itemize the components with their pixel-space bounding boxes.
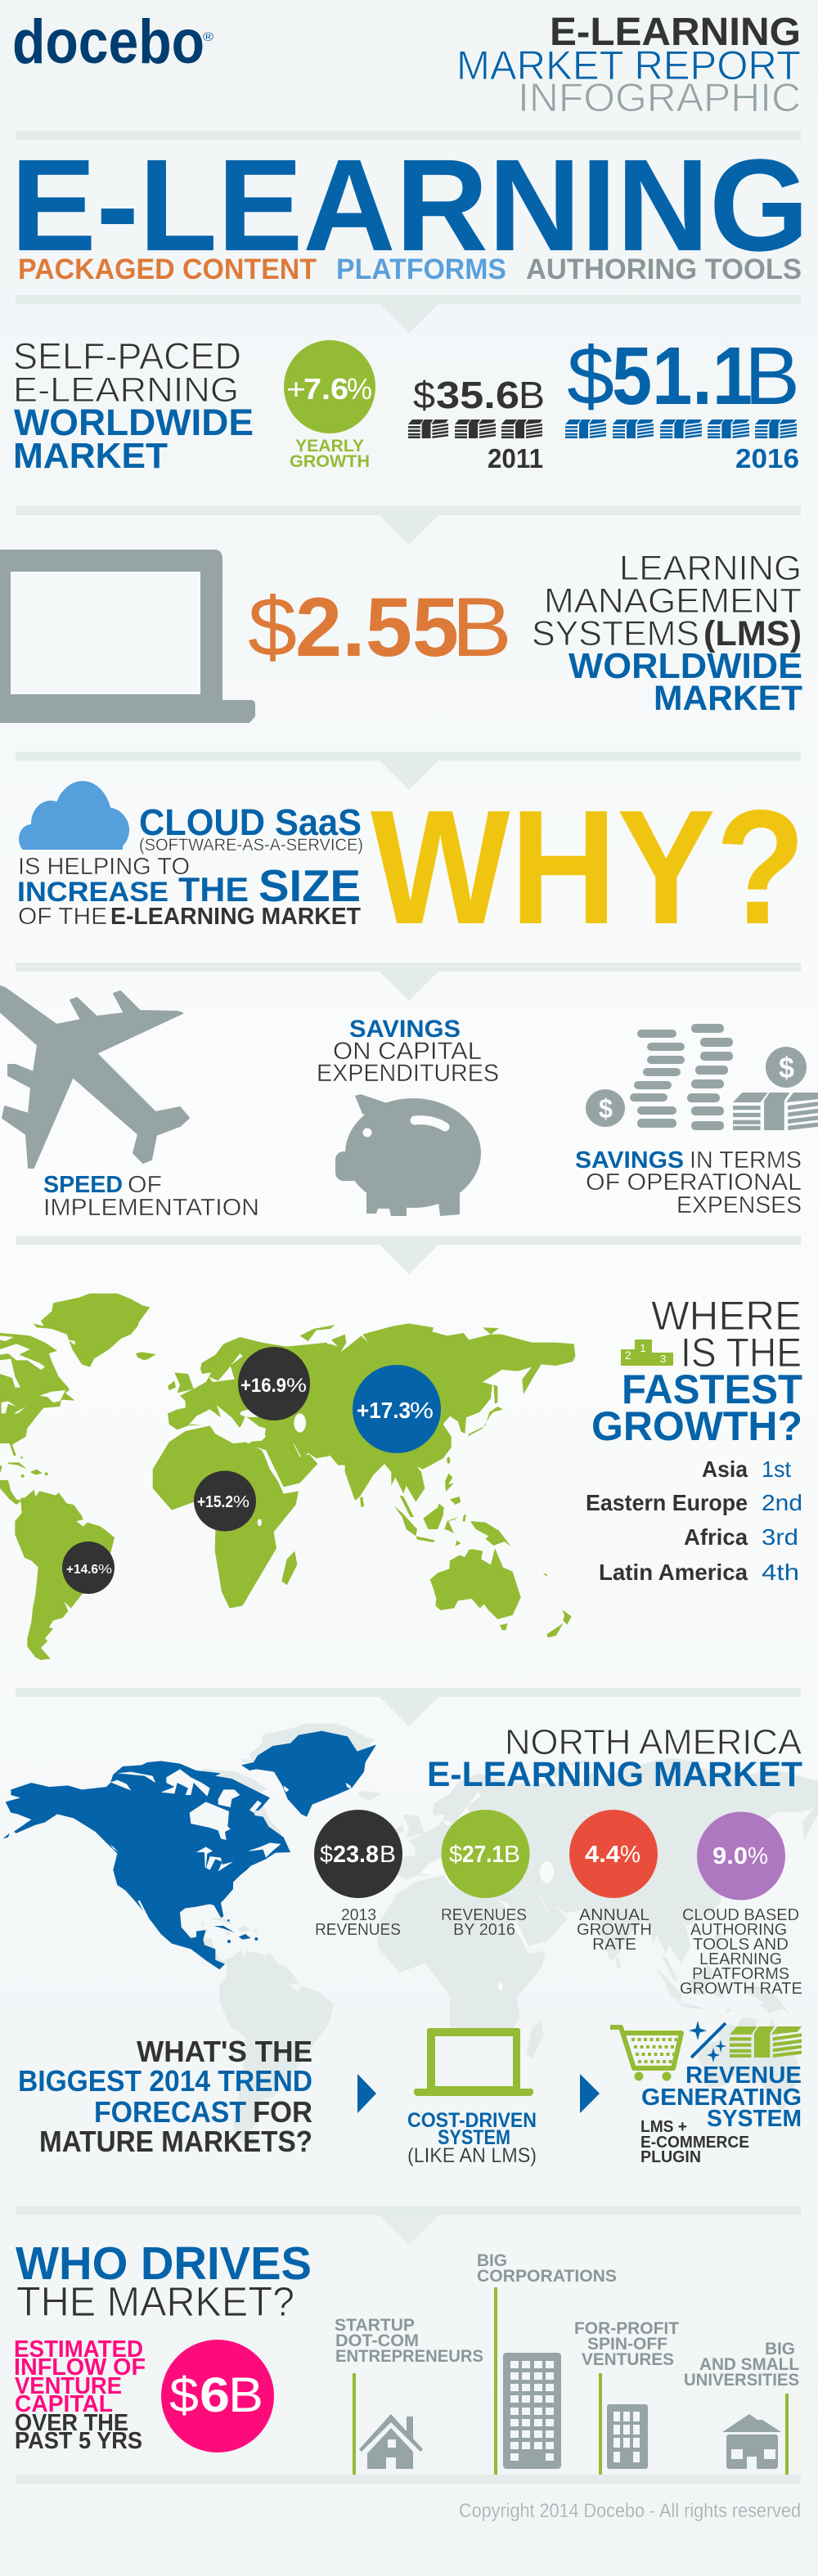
- header: report title: [456, 11, 801, 120]
- stat: revenues by 2016: REVENUES: [441, 1906, 527, 1924]
- self-paced heading: WORLDWIDE: [14, 402, 254, 443]
- icon: podium: 2: [625, 1349, 631, 1362]
- growth bubble: Latin America: %: [98, 1563, 112, 1577]
- cost-driven system text: [407, 2109, 537, 2167]
- venture capital bubble: B: [228, 2367, 263, 2422]
- icon: airplane: [0, 986, 189, 1168]
- who drives heading: WHO DRIVES: [16, 2237, 312, 2290]
- LMS value: $: [248, 581, 297, 674]
- stat: 2013 revenues: REVENUES: [315, 1921, 401, 1939]
- ranking list: 2nd: [762, 1490, 802, 1515]
- icon: podium: [621, 1340, 673, 1366]
- 2014 trend question: [18, 2035, 312, 2158]
- North America heading: NORTH AMERICA: [505, 1722, 802, 1762]
- cloud SaaS text: E-LEARNING MARKET: [110, 904, 361, 930]
- growth circle: %: [347, 372, 372, 406]
- market driver: corporations: [477, 2251, 617, 2475]
- 2016 value: $: [567, 330, 614, 422]
- fastest growth heading: IS THE: [681, 1330, 802, 1376]
- stat: cloud based growth rate: 9.0: [712, 1843, 748, 1869]
- header: report title: E-LEARNING: [550, 11, 801, 54]
- growth bubble: Eastern Europe: %: [286, 1375, 307, 1397]
- cloud SaaS text: IS HELPING TO: [18, 854, 190, 880]
- market driver: spin-off ventures: FOR-PROFIT: [574, 2319, 679, 2338]
- North America map: [2, 1731, 376, 1969]
- growth bubble: Latin America: +14.6: [66, 1563, 98, 1577]
- who drives heading: [16, 2237, 312, 2325]
- LMS heading: SYSTEMS: [532, 614, 699, 653]
- cloud SaaS text: INCREASE: [17, 877, 169, 908]
- cost-driven system text: (LIKE AN LMS): [407, 2144, 537, 2167]
- fastest growth heading: GROWTH?: [591, 1403, 802, 1449]
- header: docebo logo: docebo: [12, 7, 204, 77]
- 2011 value: B: [519, 374, 545, 416]
- stat: revenues by 2016: $: [449, 1842, 462, 1868]
- stat: annual growth rate: GROWTH: [577, 1921, 652, 1939]
- self-paced heading: MARKET: [13, 436, 168, 476]
- ranking list: 3rd: [762, 1524, 798, 1550]
- 2016 value: B: [744, 330, 800, 422]
- icon: coins and money: $: [779, 1051, 794, 1084]
- segment labels: [18, 254, 802, 285]
- venture capital bubble: [161, 2340, 274, 2453]
- arrow: [357, 2074, 376, 2113]
- stat: 2013 revenues: B: [380, 1842, 396, 1868]
- market driver: universities: UNIVERSITIES: [684, 2371, 799, 2390]
- icon: podium: 1: [640, 1342, 646, 1354]
- stat: 2013 revenues: [314, 1810, 402, 1939]
- self-paced heading: E-LEARNING: [13, 370, 239, 410]
- growth bubble: Asia: %: [410, 1398, 434, 1423]
- stat: 2013 revenues: $: [320, 1842, 333, 1868]
- venture capital text: ESTIMATED: [14, 2336, 143, 2363]
- growth circle: [284, 340, 375, 471]
- venture capital text: [14, 2336, 146, 2454]
- operational savings text: EXPENSES: [676, 1192, 802, 1218]
- LMS value: B: [452, 581, 512, 674]
- 2016 value: 2016: [735, 443, 799, 473]
- self-paced heading: SELF-PACED: [13, 335, 241, 377]
- main heading: E-LEARNING: [11, 132, 809, 278]
- revenue generating text: [640, 2062, 802, 2166]
- North America heading: [427, 1722, 802, 1794]
- cloud SaaS text: THE: [178, 870, 249, 909]
- operational savings text: SAVINGS: [575, 1147, 684, 1174]
- stat: revenues by 2016: 27.1: [462, 1842, 504, 1868]
- ranking list: Eastern Europe: [586, 1490, 748, 1515]
- ranking list: Africa: [684, 1524, 748, 1550]
- market driver: universities: AND SMALL: [699, 2355, 799, 2374]
- capital savings text: SAVINGS: [349, 1016, 461, 1043]
- 2011 value: 2011: [488, 443, 543, 473]
- stat: cloud based growth rate: PLATFORMS: [692, 1965, 789, 1983]
- stat: annual growth rate: [569, 1810, 658, 1954]
- cloud SaaS text: CLOUD SaaS: [139, 801, 362, 843]
- icon: shopping cart: [610, 2027, 681, 2080]
- 2011 value: $: [413, 374, 435, 416]
- LMS heading: MARKET: [654, 679, 802, 718]
- LMS heading: (LMS): [703, 614, 802, 653]
- LMS value: 2.55: [295, 581, 459, 674]
- speed text: [43, 1172, 259, 1221]
- 2014 trend question: BIGGEST 2014 TREND: [18, 2064, 312, 2098]
- LMS heading: WORLDWIDE: [569, 646, 802, 686]
- LMS heading: [532, 549, 802, 718]
- header: docebo logo: ®: [203, 30, 213, 44]
- venture capital bubble: 6: [200, 2367, 230, 2422]
- venture capital bubble: $: [169, 2367, 199, 2422]
- growth bubble: Africa: %: [233, 1493, 249, 1511]
- ranking list: Latin America: [599, 1560, 748, 1585]
- stat: revenues by 2016: [441, 1810, 530, 1939]
- fastest growth heading: FASTEST: [622, 1367, 802, 1412]
- stat: annual growth rate: %: [620, 1842, 640, 1868]
- stat: annual growth rate: 4.4: [585, 1842, 620, 1868]
- market driver: spin-off ventures: VENTURES: [582, 2350, 674, 2369]
- growth bubble: Africa: +15.2: [197, 1493, 233, 1511]
- venture capital text: INFLOW OF: [14, 2354, 146, 2381]
- icon: coins and money: $: [599, 1093, 613, 1124]
- cloud SaaS text: [17, 801, 363, 930]
- stat: cloud based growth rate: CLOUD BASED: [682, 1906, 799, 1924]
- 2016 value: [565, 330, 800, 473]
- growth circle: YEARLY: [295, 437, 364, 456]
- segment labels: AUTHORING TOOLS: [526, 254, 802, 285]
- growth bubble: Eastern Europe: [238, 1347, 310, 1420]
- operational savings text: IN TERMS: [690, 1147, 802, 1174]
- revenue generating text: GENERATING: [641, 2085, 802, 2111]
- venture capital text: PAST 5 YRS: [15, 2428, 142, 2454]
- fastest growth heading: [591, 1293, 802, 1449]
- segment labels: PACKAGED CONTENT: [18, 254, 317, 285]
- speed text: OF: [128, 1172, 162, 1198]
- header: report title: INFOGRAPHIC: [518, 76, 801, 120]
- 2016 value: 51.1: [612, 330, 753, 422]
- cost-driven system text: SYSTEM: [438, 2126, 510, 2149]
- stat: revenues by 2016: BY 2016: [453, 1921, 515, 1939]
- cloud SaaS text: SIZE: [258, 860, 361, 911]
- venture capital text: OVER THE: [15, 2410, 128, 2436]
- market driver: startups: DOT-COM: [335, 2331, 419, 2350]
- ranking list: 4th: [762, 1560, 799, 1585]
- icon: laptop: [0, 550, 255, 723]
- North America heading: E-LEARNING MARKET: [427, 1755, 802, 1794]
- 2014 trend question: MATURE MARKETS?: [39, 2125, 312, 2158]
- segment labels: PLATFORMS: [336, 254, 506, 285]
- 2014 trend question: FOR: [253, 2095, 312, 2129]
- market driver: corporations: BIG: [477, 2251, 507, 2270]
- growth circle: +: [286, 372, 306, 406]
- ranking list: Asia: [702, 1456, 748, 1482]
- stat: cloud based growth rate: %: [748, 1843, 768, 1869]
- revenue generating text: SYSTEM: [707, 2106, 802, 2132]
- stat: annual growth rate: ANNUAL: [579, 1906, 649, 1924]
- market driver: startups: ENTREPRENEURS: [335, 2347, 483, 2366]
- icon: piggy bank: [335, 1094, 481, 1216]
- LMS heading: MANAGEMENT: [544, 581, 802, 621]
- ranking list: 1st: [762, 1456, 791, 1482]
- stat: cloud based growth rate: TOOLS AND: [693, 1936, 789, 1954]
- growth bubble: Latin America: [62, 1542, 115, 1594]
- icon: coins and money: [586, 1024, 818, 1130]
- arrow: [580, 2074, 600, 2113]
- stat: 2013 revenues: 2013: [341, 1906, 376, 1924]
- stat: 2013 revenues: 23.8: [333, 1842, 379, 1868]
- speed text: SPEED: [43, 1172, 123, 1198]
- stat: annual growth rate: RATE: [592, 1936, 636, 1954]
- stat: revenues by 2016: B: [504, 1842, 520, 1868]
- growth bubble: Africa: [194, 1470, 256, 1531]
- market driver: startups: [335, 2316, 483, 2475]
- revenue generating text: PLUGIN: [640, 2148, 701, 2166]
- stat: cloud based growth rate: [680, 1812, 802, 1998]
- header: report title: MARKET REPORT: [456, 43, 801, 88]
- self-paced heading: [13, 335, 254, 476]
- revenue generating text: LMS +: [640, 2118, 687, 2136]
- who drives heading: THE MARKET?: [16, 2278, 294, 2325]
- icon: podium: 3: [660, 1353, 666, 1365]
- ranking list: [586, 1456, 802, 1585]
- stat: cloud based growth rate: AUTHORING: [690, 1921, 787, 1939]
- capital savings text: EXPENDITURES: [317, 1060, 499, 1087]
- icon: green money: [730, 2026, 802, 2058]
- growth bubble: Eastern Europe: +16.9: [240, 1375, 286, 1397]
- market driver: spin-off ventures: SPIN-OFF: [587, 2335, 667, 2354]
- icon: cloud: [19, 781, 129, 850]
- stat: cloud based growth rate: LEARNING: [699, 1950, 782, 1968]
- LMS heading: LEARNING: [619, 549, 802, 588]
- venture capital text: CAPITAL: [15, 2391, 113, 2417]
- revenue generating text: E-COMMERCE: [640, 2134, 749, 2152]
- 2011 value: 35.6: [436, 374, 519, 416]
- market driver: startups: STARTUP: [335, 2316, 415, 2335]
- capital savings text: [317, 1016, 499, 1087]
- cloud SaaS text: OF THE: [18, 904, 107, 930]
- growth bubble: Asia: +17.3: [357, 1398, 411, 1423]
- pale world map background: [202, 1723, 818, 2145]
- growth bubble: Asia: [353, 1365, 441, 1453]
- market driver: universities: [684, 2340, 799, 2475]
- capital savings text: ON CAPITAL: [333, 1038, 482, 1065]
- market driver: corporations: CORPORATIONS: [477, 2267, 617, 2286]
- operational savings text: [575, 1147, 802, 1218]
- LMS value: [248, 581, 512, 674]
- cost-driven system text: COST-DRIVEN: [407, 2109, 537, 2132]
- fastest growth heading: WHERE: [651, 1293, 802, 1339]
- market driver: universities: BIG: [765, 2340, 795, 2358]
- stat: cloud based growth rate: GROWTH RATE: [680, 1980, 802, 1998]
- world map: [0, 1294, 575, 1660]
- icon: green laptop: [414, 2028, 533, 2096]
- 2011 value: [408, 374, 545, 473]
- venture capital text: VENTURE: [15, 2373, 122, 2399]
- cloud SaaS text: (SOFTWARE-AS-A-SERVICE): [139, 836, 363, 855]
- revenue generating text: REVENUE: [685, 2062, 802, 2089]
- operational savings text: OF OPERATIONAL: [586, 1169, 802, 1196]
- icon: magic wand: [689, 2021, 726, 2062]
- growth circle: GROWTH: [290, 452, 370, 471]
- growth circle: 7.6: [303, 372, 348, 406]
- speed text: IMPLEMENTATION: [43, 1195, 259, 1221]
- market driver: spin-off ventures: [574, 2319, 679, 2475]
- 2014 trend question: FORECAST: [94, 2095, 246, 2129]
- 2014 trend question: WHAT'S THE: [137, 2035, 312, 2068]
